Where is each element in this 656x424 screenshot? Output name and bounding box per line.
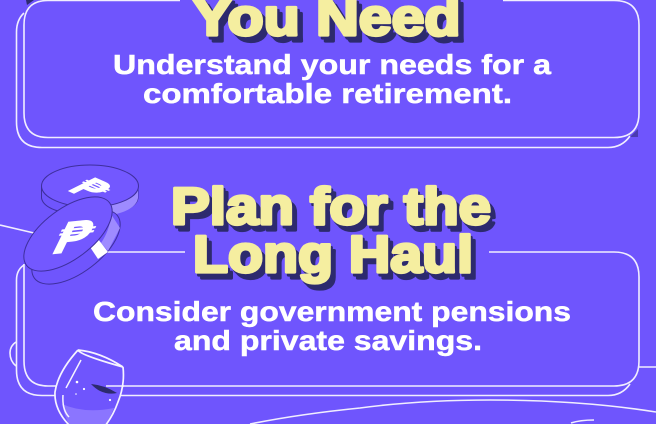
heading: plan for the long haul: Plan for the <box>173 181 493 239</box>
heading: plan for the long haul: Plan for the <box>176 184 496 242</box>
heading: plan for the long haul: Plan for the <box>171 178 491 236</box>
text: understand your needs <box>113 49 551 109</box>
heading: plan for the long haul: Long Haul <box>198 232 478 290</box>
panel: you need <box>16 0 639 148</box>
text: consider government pensions: and private savings. <box>174 325 482 356</box>
decorative scene lines <box>0 225 656 424</box>
heading: plan for the long haul <box>171 178 496 290</box>
icon: stacked peso coins <box>11 165 139 298</box>
icon: front coin: ₱ <box>42 211 104 266</box>
icon: back coin: ₱ <box>55 173 124 205</box>
text: consider government pensions <box>93 296 571 356</box>
text: consider government pensions: Consider government pensions <box>93 296 571 327</box>
heading: plan for the long haul: Long Haul <box>195 229 475 287</box>
text: understand your needs: Understand your needs for a <box>113 49 551 80</box>
panel: long haul <box>16 252 639 396</box>
text: understand your needs: comfortable retirement. <box>143 78 512 109</box>
icon: wine glass <box>55 350 124 424</box>
heading: plan for the long haul: Long Haul <box>193 226 473 284</box>
